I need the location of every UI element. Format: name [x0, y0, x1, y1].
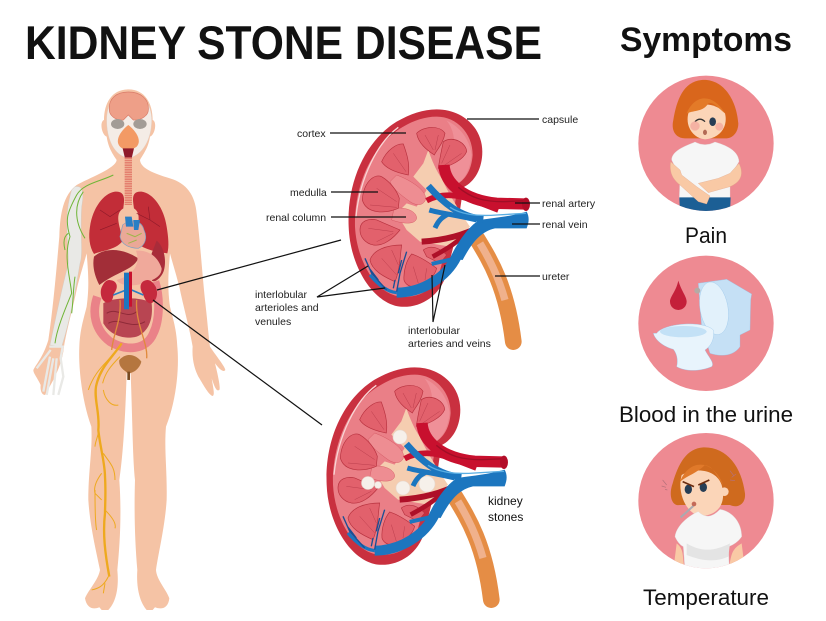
label: pain: Pain: [685, 223, 727, 248]
girl holding stomach: [670, 80, 741, 213]
liver: [93, 250, 138, 285]
label: renal artery: renal artery: [542, 198, 596, 210]
label: interlobular arterioles and venules: venules: [255, 316, 291, 328]
label: interlobular arteries and veins: interlobular: [408, 325, 460, 337]
intestines: [95, 282, 159, 348]
ureters: [112, 300, 147, 358]
label: renal vein: [512, 219, 588, 231]
label: renal artery: [515, 198, 596, 210]
label: kidney stones: [488, 494, 523, 524]
leader line to bottom kidney: [153, 300, 322, 425]
label: capsule: capsule: [542, 114, 578, 126]
nerves: green: [55, 175, 113, 343]
label: medulla: [290, 187, 378, 199]
label: ureter: [495, 271, 570, 283]
stomach: [152, 241, 165, 281]
title: KIDNEY STONE DISEASE: [25, 16, 542, 69]
heading: symptoms: Symptoms: [620, 21, 792, 59]
label: blood in the urine: Blood in the urine: [619, 402, 793, 427]
label: interlobular arteries and veins: [408, 265, 491, 350]
label: interlobular arteries and veins: arteries and veins: [408, 338, 491, 350]
human body anatomy figure: [33, 89, 225, 610]
label: kidney stones: kidney: [488, 494, 523, 508]
icon: toilet: [653, 279, 752, 370]
kidney stones: [362, 430, 435, 495]
nerves: yellow: [88, 343, 122, 593]
bottom kidney with stones: [327, 367, 508, 600]
label: interlobular arterioles and venules: arterioles and: [255, 302, 319, 314]
label: medulla: medulla: [290, 187, 327, 199]
symptom: temperature: [638, 433, 774, 570]
skull and brain: [107, 92, 152, 158]
arm skeleton: [37, 186, 83, 395]
label: cortex: [297, 128, 406, 140]
kidneys: [101, 280, 157, 303]
label: ureter: ureter: [542, 271, 570, 283]
icon: blood drop: [670, 281, 687, 310]
label: interlobular arterioles and venules: [255, 266, 385, 328]
girl with thermometer: [671, 447, 745, 570]
symptom: blood in the urine: [638, 256, 774, 391]
label: renal column: [266, 212, 406, 224]
top kidney cross-section: [349, 109, 530, 342]
heart: [120, 221, 146, 248]
bladder: [119, 355, 141, 373]
lungs: [89, 192, 168, 254]
label: capsule: [467, 114, 578, 126]
label: temperature: Temperature: [643, 585, 769, 610]
symptom: pain: [638, 76, 774, 213]
label: cortex: cortex: [297, 128, 326, 140]
label: renal column: renal column: [266, 212, 326, 224]
aorta and vena cava: [124, 273, 129, 309]
kidney labels: [255, 114, 596, 524]
label: renal vein: renal vein: [542, 219, 588, 231]
label: interlobular arterioles and venules: interlobular: [255, 289, 307, 301]
trachea: [117, 157, 139, 205]
leader line to top kidney: [157, 240, 341, 290]
body silhouette: [33, 89, 225, 610]
label: kidney stones: stones: [488, 510, 523, 524]
stress marks: [662, 471, 736, 490]
